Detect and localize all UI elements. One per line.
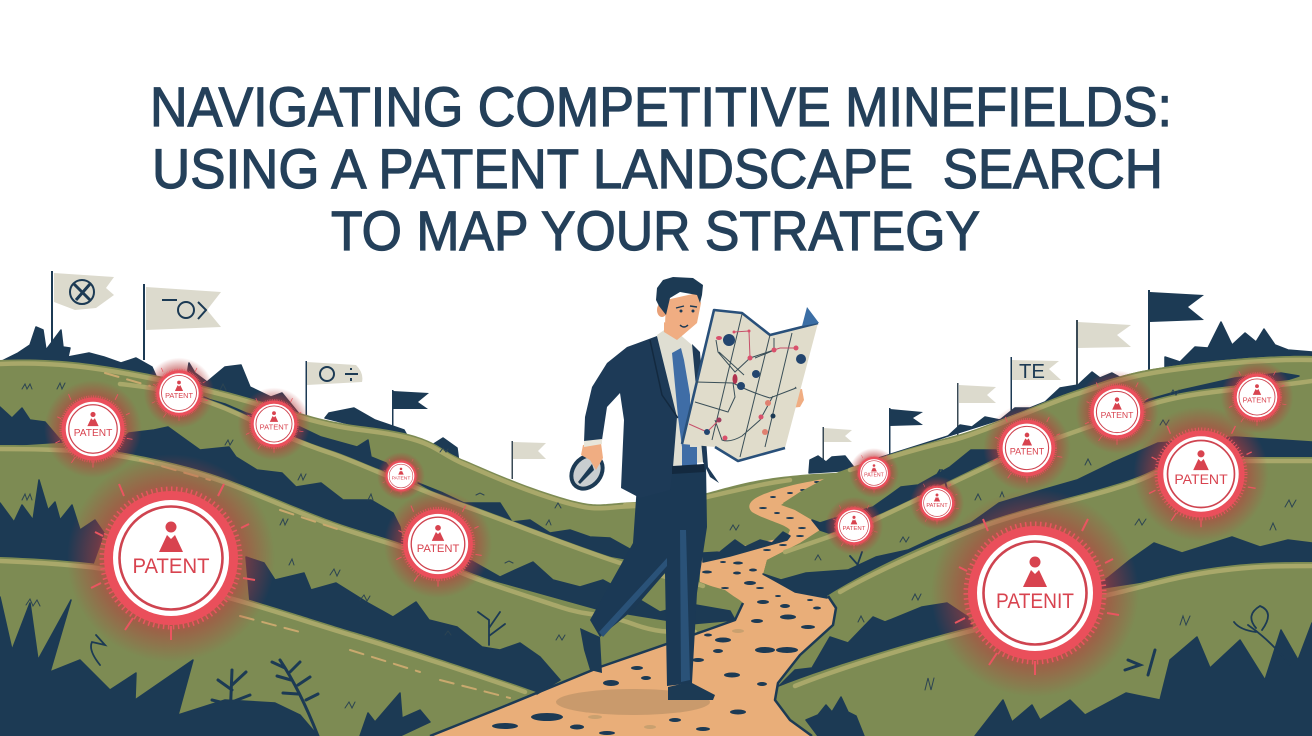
- shoes: [580, 628, 715, 700]
- badge: small right a: PATENT: [864, 473, 884, 479]
- badge: top left small: PATENT: [165, 392, 194, 400]
- path edge outlines: [430, 596, 836, 736]
- hills: right back and layers: [763, 356, 1312, 736]
- badge: upper right: [1075, 370, 1159, 454]
- map: [682, 307, 819, 461]
- hill: left front: [0, 557, 536, 736]
- badge: upper right: PATENT: [1101, 410, 1133, 420]
- title: TO MAP YOUR STRATEGY: [331, 199, 980, 262]
- hill: right second: [763, 377, 1312, 736]
- map pins: [704, 334, 806, 435]
- badge: centre right: PATENT: [1010, 446, 1045, 456]
- front ridge highlight: [0, 561, 525, 692]
- badge: upper left: [44, 380, 142, 478]
- badge: top left small: [144, 358, 214, 428]
- jacket: [584, 336, 719, 498]
- badge: medium left: [384, 490, 492, 598]
- bushes: left middle hill: [0, 407, 735, 624]
- hill: left second: [0, 445, 707, 736]
- winding path: [430, 477, 836, 736]
- badge: far right: PATENT: [1243, 395, 1272, 404]
- map roads: [695, 314, 796, 457]
- belt: [672, 464, 705, 474]
- badge: centre right: [983, 404, 1071, 492]
- title: USING A PATENT LANDSCAPE SEARCH: [152, 137, 1163, 200]
- compass and hand: [562, 439, 612, 498]
- badge: centre left small: PATENT: [260, 422, 289, 431]
- badge: small right c: PATENT: [843, 526, 866, 532]
- tie: [672, 348, 697, 472]
- badge: large right: PATENIT: [996, 590, 1074, 613]
- title: NAVIGATING COMPETITIVE MINEFIELDS:: [150, 75, 1172, 138]
- patent badges: left: [44, 358, 492, 662]
- badge: medium left: PATENT: [417, 543, 460, 555]
- badge: upper left: PATENT: [74, 428, 112, 439]
- facial features: [676, 306, 697, 327]
- lapel line: [650, 340, 678, 418]
- second ridge highlight: [0, 449, 695, 632]
- badge: medium right: PATENT: [1174, 472, 1228, 487]
- badge: tiny left: PATENT: [392, 475, 410, 481]
- trouser highlights: [599, 530, 690, 682]
- badge: large right: [931, 489, 1139, 697]
- hill: right third: [775, 457, 1312, 736]
- patent badges: right: [825, 361, 1293, 697]
- map corner flag: [802, 307, 819, 326]
- foreground foliage: left: [0, 597, 318, 736]
- badge: small right b: [910, 476, 964, 530]
- flags: left hillside: [51, 271, 546, 479]
- shirt: [657, 326, 705, 466]
- title: [150, 75, 1172, 262]
- hills: left middle: [0, 380, 743, 736]
- badge: small right a: [849, 448, 899, 498]
- hill: right front: [775, 562, 1312, 736]
- bushes on the skyline: [0, 322, 1312, 473]
- neck and face: [664, 293, 701, 340]
- foreground foliage: right: [975, 623, 1312, 736]
- badge: centre left small: [238, 388, 310, 460]
- path stones: [492, 481, 821, 735]
- foreground foliage: bottom right of path: [806, 697, 864, 736]
- badge: tiny left: [377, 452, 425, 500]
- flags: right hillside: [822, 290, 1204, 461]
- badge: medium right: [1133, 406, 1269, 542]
- businessman with map and compass: [556, 277, 819, 715]
- foreground foliage: bottom middle-left: [360, 693, 430, 736]
- badge: small right b: PATENT: [926, 503, 948, 509]
- badge: large left: [67, 454, 275, 662]
- badge: far right: [1221, 361, 1293, 433]
- ridge dashes: [105, 373, 510, 698]
- trousers: [590, 464, 707, 686]
- bushes: right second hill: [763, 437, 1312, 598]
- back range ridge highlight: [0, 360, 1312, 508]
- left middle ridge highlight: [120, 384, 703, 586]
- plants and sprigs: [91, 470, 1290, 736]
- hills: back range: [0, 356, 1312, 736]
- hand behind map: [790, 389, 804, 408]
- bushes: centre back hill: [204, 397, 790, 565]
- ground shadow: [556, 689, 710, 715]
- grass tufts: [22, 383, 1296, 708]
- flags: right hillside: TE: [1019, 361, 1045, 383]
- bushes: right upper hill: [812, 373, 1299, 535]
- bushes: right third hill: [778, 537, 1312, 687]
- bushes: left second hill: [0, 480, 560, 694]
- badge: large left: PATENT: [132, 555, 210, 578]
- hair: [656, 277, 703, 315]
- badge: small right c: [825, 497, 883, 555]
